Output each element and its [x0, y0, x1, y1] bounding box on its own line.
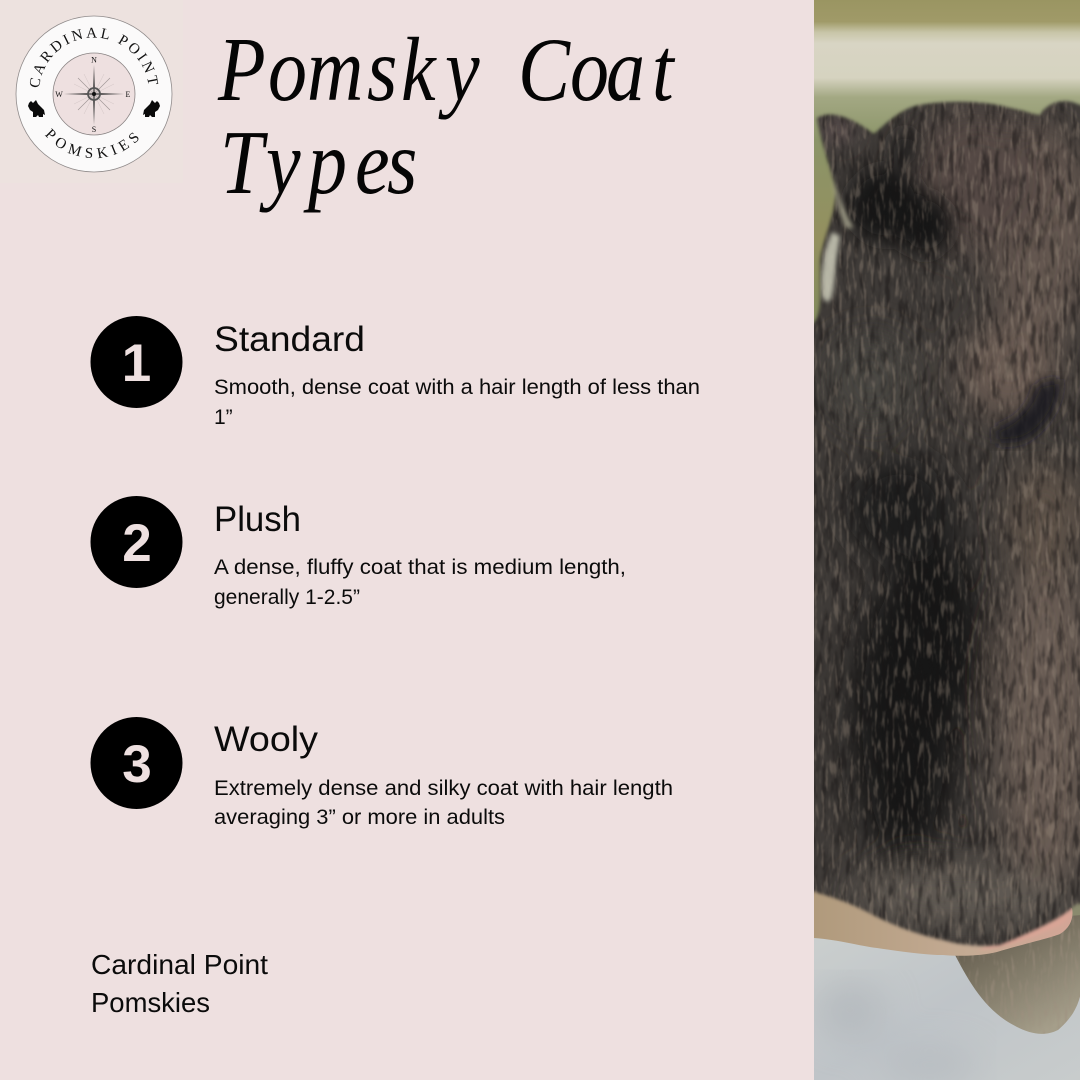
dark patch behind ear	[847, 167, 923, 243]
logo compass: W	[55, 90, 63, 99]
number badge 1: 1	[122, 334, 151, 393]
tonal fur zones	[850, 570, 960, 870]
heading: Wooly: Wooly	[214, 720, 319, 759]
number badge 3: 3	[122, 735, 152, 794]
heading: Standard: Standard	[214, 320, 365, 359]
description: Standard: Smooth, dense coat with a hair length of less than	[214, 376, 700, 399]
title: Pomsky Coat	[217, 19, 676, 120]
footer brand name: Cardinal Point	[91, 949, 268, 980]
item 2: Plush	[90, 496, 626, 609]
thumb	[984, 922, 1058, 950]
ground	[814, 930, 1080, 1080]
logo compass: N	[91, 56, 97, 64]
dog body	[800, 90, 1080, 960]
arm	[814, 885, 1072, 956]
description: Plush: generally 1-2.5”	[214, 586, 360, 609]
photo: dog seen from behind	[800, 0, 1080, 1080]
item 1: Standard	[90, 316, 700, 429]
number badge 1	[90, 316, 182, 408]
footer brand name: Pomskies	[91, 987, 210, 1018]
description: Plush: A dense, fluffy coat that is medium length,	[214, 556, 626, 579]
pale inner ear	[832, 175, 854, 228]
tail	[955, 915, 1080, 1034]
logo: Cardinal Point Pomskies	[16, 16, 172, 172]
item 3: Wooly	[90, 717, 673, 829]
number badge 2	[90, 496, 182, 588]
logo text: Cardinal Point: CARDINAL POINT	[30, 28, 158, 88]
logo dog left	[28, 100, 45, 117]
white neck patch	[821, 232, 840, 302]
logo dog right	[143, 100, 160, 117]
logo compass: S	[92, 125, 96, 134]
description: Wooly: averaging 3” or more in adults	[214, 806, 505, 829]
blue-black shadow patch	[994, 378, 1060, 444]
title: Types	[220, 112, 417, 213]
heading: Plush: Plush	[214, 500, 301, 539]
description: Wooly: Extremely dense and silky coat with hair length	[214, 777, 673, 800]
logo compass: E	[126, 90, 131, 99]
number badge 3	[90, 717, 182, 809]
logo compass	[55, 56, 131, 134]
description: Standard: 1”	[214, 406, 233, 429]
title	[217, 19, 676, 213]
logo text: Pomskies: POMSKIES	[44, 128, 138, 158]
number badge 2: 2	[122, 514, 152, 573]
